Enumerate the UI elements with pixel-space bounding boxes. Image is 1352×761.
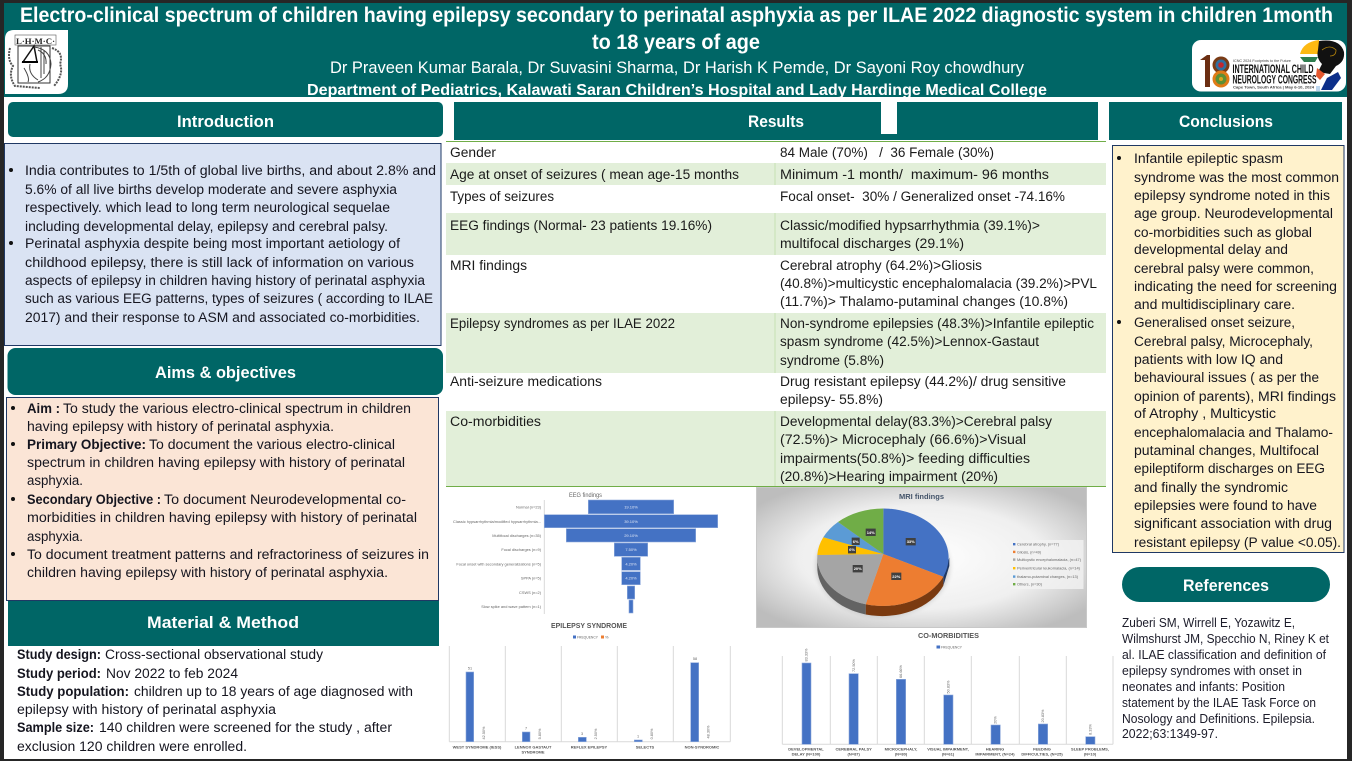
authors: Dr Praveen Kumar Barala, Dr Suvasini Sharma, Dr Harish K Pemde, Dr Sayoni Roy chowdhury [330, 59, 1025, 77]
heading: Results: Results [748, 113, 804, 131]
chart: EEG findings funnel [453, 492, 718, 614]
panel: conclusions text: age group. Neurodevelopmental [1134, 206, 1333, 221]
chart: MRI findings pie [756, 488, 1086, 628]
chart: EEG findings funnel: Normal (n=23) [516, 504, 542, 510]
panel: introduction text: 2017) and their response to ASM and associated co-morbidities. [25, 310, 420, 325]
text block: references: epilepsy syndromes with onset in [1122, 664, 1302, 678]
row: co-morbidities: Developmental delay(83.3%)>Cerebral palsy [780, 414, 1052, 429]
chart: EEG findings funnel: 19.10% [624, 504, 638, 510]
chart: co-morbidities bars: 8.33% [1088, 724, 1092, 735]
heading: Material & Method: Material & Method [147, 614, 299, 632]
chart: epilepsy syndrome bars: SYNDROME [521, 750, 545, 754]
row: age at onset: Minimum -1 month/ maximum- 96 months [780, 167, 1049, 182]
chart: co-morbidities bars: (N=80) [895, 752, 908, 756]
header banner [4, 3, 1347, 99]
chart: epilepsy syndrome bars: 42.50% [482, 726, 486, 739]
panel: conclusions text: co-morbidities such as global [1134, 225, 1312, 240]
panel: aims text: asphyxia. [27, 529, 83, 544]
chart: epilepsy syndrome bars: 58 [693, 657, 697, 661]
title: to 18 years of age [592, 31, 760, 54]
legend: FREQUENCY [577, 634, 598, 640]
pie legend: Gliosis, (n=49) [1017, 549, 1042, 554]
row: MRI findings: (40.8%)>multicystic encephalomalacia (39.2%)>PVL [780, 276, 1097, 291]
chart: epilepsy syndrome bars: EPILEPSY SYNDROME [551, 621, 627, 630]
text block: references [1122, 616, 1329, 741]
row: epilepsy syndromes: syndrome (5.8%) [780, 353, 884, 368]
pie legend: Periventricular leukomalacia, (n=14) [1017, 566, 1081, 571]
chart: co-morbidities bars: DELAY (N=100) [792, 752, 821, 756]
pie legend [1010, 540, 1084, 589]
pie labels: 14% [867, 530, 875, 535]
panel: conclusions text: patients with low IQ and [1134, 352, 1283, 367]
logo: International Child Neurology Congress: ICNC 2024 Footprints to the Future [1233, 59, 1291, 63]
row: anti-seizure medications: Drug resistant epilepsy (44.2%)/ drug sensitive [780, 374, 1066, 389]
chart: EEG findings funnel: 29.10% [624, 533, 638, 538]
heading: Aims & objectives [8, 348, 443, 395]
chart: co-morbidities bars: HEARING [986, 746, 1004, 752]
text block: study details: exclusion 120 children were enrolled. [17, 739, 247, 754]
pie legend: Multicystic encephalomalacia, (n=47) [1017, 557, 1082, 562]
panel: introduction text: including developmental delay, epilepsy and cerebral palsy. [25, 219, 388, 234]
row: epilepsy syndromes: Non-syndrome epilepsies (48.3%)>Infantile epileptic [780, 316, 1094, 331]
text block: references: Nosology and Definitions. Epilepsia. [1122, 712, 1315, 726]
pie labels: 22% [892, 574, 901, 579]
text block: references: Zuberi SM, Wirrell E, Yozawitz E, [1122, 616, 1295, 630]
heading: References [1122, 567, 1330, 602]
chart: co-morbidities bars: DEVELOPMENTAL [788, 746, 824, 752]
panel: aims text: Aim : [27, 401, 60, 416]
panel: conclusions text: indicating the need for screening [1134, 279, 1337, 294]
row: age at onset [450, 167, 1049, 182]
chart: epilepsy syndrome bars: 1 [637, 734, 639, 738]
row: co-morbidities: Co-morbidities [450, 414, 541, 429]
chart: EEG findings funnel: 4.20% [625, 561, 637, 566]
pie legend: thalamo-putaminal changes, (n=13) [1017, 574, 1079, 579]
chart: EEG findings funnel: Multifocal discharges (n=35) [492, 533, 542, 538]
pie labels: 6% [853, 539, 859, 544]
chart: co-morbidities bars: 72.50% [852, 658, 856, 672]
row: anti-seizure medications: epilepsy- 55.8%) [780, 392, 883, 407]
panel: aims text: children having epilepsy with history of perinatal asphyxia. [27, 565, 388, 580]
panel: aims text: having epilepsy with history of perinatal asphyxia. [27, 419, 334, 434]
text block: study details: Study design: [17, 647, 101, 662]
chart: co-morbidities bars: 20% [994, 716, 998, 724]
row: epilepsy syndromes: Epilepsy syndromes as per ILAE 2022 [450, 316, 675, 331]
row: age at onset: Age at onset of seizures ( mean age-15 months [450, 167, 739, 182]
text block: study details: Study population: [17, 684, 129, 699]
panel: conclusions text: epileptiform discharges on EEG [1134, 461, 1325, 476]
chart: epilepsy syndrome bars: 0.80% [650, 728, 654, 739]
panel: conclusions text: developmental delay and [1134, 242, 1288, 257]
panel: conclusions text: epilepsies were found to have [1134, 498, 1317, 513]
panel: conclusions text: Infantile epileptic spasm [1134, 151, 1283, 166]
chart: co-morbidities bars: FEEDING [1033, 746, 1051, 752]
panel: aims text: To document Neurodevelopmental co- [164, 492, 406, 507]
heading: Conclusions [1109, 102, 1342, 140]
text block: references: statement by the ILAE Task Force on [1122, 696, 1316, 710]
panel: aims text: morbidities in children having epilepsy with history of perinatal [27, 510, 417, 525]
panel: conclusions text: of Atrophy , Multicystic [1134, 406, 1276, 421]
row: types of seizures [450, 189, 1065, 204]
chart: EEG findings funnel: Focal onset with secondary generalizations (n=5) [456, 561, 542, 566]
row: co-morbidities: (20.8%)>Hearing impairment (20%) [780, 469, 998, 484]
panel: aims text: To document the various electro-clinical [149, 437, 395, 452]
logo: LHMC emblem [5, 30, 68, 94]
panel: conclusions text [1112, 146, 1344, 552]
chart: co-morbidities bars: IMPAIRMENT, (N=24) [975, 752, 1015, 756]
panel: introduction text: 5.6% of all live births develop moderate and severe asphyxia [25, 182, 397, 197]
text block: study details [17, 647, 413, 754]
logo: LHMC emblem: L·H·M·C· [16, 36, 55, 46]
panel: introduction text: India contributes to 1/5th of global live births, and about 2.8% and [25, 163, 436, 178]
chart: EEG findings funnel: Slow spike and wave pattern (n=1) [481, 604, 542, 609]
row: gender: Gender [450, 145, 497, 160]
chart: co-morbidities bars: CO-MORBIDITIES [918, 631, 979, 640]
pie legend: Others, (n=30) [1017, 582, 1043, 587]
panel: conclusions text: syndrome was the most common [1134, 170, 1339, 185]
pie sides [817, 558, 949, 616]
panel: aims text: To study the various electro-clinical spectrum in children [63, 401, 411, 416]
chart: co-morbidities bars: CEREBRAL PALSY [836, 746, 872, 752]
chart: epilepsy syndrome bars: 48.30% [706, 725, 710, 738]
panel: introduction text: respectively. which lead to long term neurological sequelae [25, 200, 390, 215]
chart: co-morbidities bars [782, 631, 1113, 756]
panel: aims text: spectrum in children having epilepsy with history of perinatal [27, 455, 405, 470]
chart: co-morbidities bars: 50.83% [946, 680, 950, 693]
results table [446, 142, 1106, 486]
heading: Results [454, 102, 1098, 140]
heading: Material & Method [8, 601, 439, 646]
panel: introduction text: aspects of epilepsy in children having history of perinatal asphyxia [25, 273, 425, 288]
text block: references: neonates and infants: Position [1122, 680, 1285, 694]
chart: MRI findings pie: MRI findings [899, 492, 944, 501]
panel: conclusions text: opinion of parents), MRI findings [1134, 389, 1336, 404]
text block: study details: epilepsy with history of perinatal asphyxia [17, 702, 277, 717]
chart: epilepsy syndrome bars: NON-SYNDROMIC [685, 744, 719, 750]
panel: conclusions text: encephalomalacia and Thalamo- [1134, 425, 1333, 440]
title [20, 4, 1333, 54]
row: co-morbidities [450, 414, 1052, 484]
panel: aims text: Secondary Objective : [27, 492, 161, 507]
text block: study details: 140 children were screened for the study , after [99, 720, 393, 735]
chart: epilepsy syndrome bars: LENNOX GASTAUT [515, 744, 552, 750]
chart: epilepsy syndrome bars: 3 [581, 732, 583, 736]
heading: Introduction [8, 102, 443, 137]
chart: epilepsy syndrome bars: SELECTS [636, 744, 655, 750]
panel: introduction text [4, 144, 441, 346]
row: epilepsy syndromes: spasm syndrome (42.5%)>Lennox-Gastaut [780, 334, 1039, 349]
chart: EEG findings funnel: Focal discharges (n=9) [501, 547, 542, 552]
row: MRI findings: Cerebral atrophy (64.2%)>Gliosis [780, 258, 982, 273]
text block: study details: Nov 2022 to feb 2024 [106, 666, 238, 681]
panel: introduction text: Perinatal asphyxia despite being most important aetiology of [25, 236, 400, 251]
chart: epilepsy syndrome bars: 2.50% [594, 728, 598, 739]
row: EEG findings: EEG findings (Normal- 23 patients 19.16%) [450, 218, 712, 233]
panel: conclusions text: Cerebral palsy, Microcephaly, [1134, 334, 1313, 349]
pie labels: 20% [854, 566, 862, 571]
chart: epilepsy syndrome bars: 5.80% [538, 728, 542, 739]
logo: International Child Neurology Congress: Cape Town, South Africa | May 6-10, 2024 [1233, 86, 1315, 90]
text block: study details: Sample size: [17, 720, 94, 735]
heading: Introduction: Introduction [177, 113, 274, 131]
panel: conclusions text: Generalised onset seizure, [1134, 315, 1295, 330]
chart: EEG findings funnel: Classic hypsarrhythmia/modified hypsarrhythmia... [453, 519, 541, 524]
chart: epilepsy syndrome bars: 7 [525, 726, 527, 730]
chart: EEG findings funnel: EEG findings [569, 492, 603, 499]
panel: conclusions text: and finally the syndromic [1134, 480, 1288, 495]
row: gender: 84 Male (70%) / 36 Female (30%) [780, 145, 994, 160]
legend: FREQUENCY [941, 644, 962, 650]
pie legend: Cerebral atrophy, (n=77) [1017, 542, 1060, 547]
chart: epilepsy syndrome bars [449, 621, 730, 754]
chart: co-morbidities bars: SLEEP PROBLEMS, [1071, 746, 1109, 752]
text block: references: Wilmshurst JM, Specchio N, Riney K et [1122, 632, 1329, 646]
panel: introduction text: such as various EEG patterns, types of seizures ( according to ILAE [25, 291, 433, 306]
chart: co-morbidities bars: (N=61) [942, 752, 955, 756]
chart: EEG findings funnel: 4.20% [625, 576, 637, 581]
chart: co-morbidities bars: 66.66% [899, 664, 903, 678]
text block: study details: Study period: [17, 666, 101, 681]
chart: epilepsy syndrome bars: 51 [468, 666, 472, 670]
panel: conclusions text: resistant epilepsy (P value <0.05). [1134, 535, 1341, 550]
pie labels [848, 529, 916, 580]
panel: conclusions text: putaminal changes, Multifocal [1134, 443, 1319, 458]
row: types of seizures: Types of seizures [450, 189, 554, 204]
row: EEG findings: multifocal discharges (29.1%) [780, 236, 964, 251]
pie labels: 33% [907, 539, 915, 544]
row: MRI findings: (11.7%)> Thalamo-putaminal changes (10.8%) [780, 294, 1068, 309]
legend [573, 634, 609, 640]
panel: conclusions text: epilepsy syndrome noted in this [1134, 188, 1330, 203]
chart: co-morbidities bars: DIFFICULTIES, (N=25) [1021, 752, 1063, 756]
chart: co-morbidities bars: VISUAL IMPAIRMENT, [927, 746, 969, 752]
logo: International Child Neurology Congress [1192, 40, 1346, 92]
chart: epilepsy syndrome bars: WEST SYNDROME (IESS) [453, 744, 502, 750]
department: Department of Pediatrics, Kalawati Saran Children’s Hospital and Lady Hardinge Medical College [307, 82, 1047, 99]
chart: epilepsy syndrome bars: REFLEX EPILEPSY [571, 744, 608, 750]
panel: conclusions text: and multidisciplinary care. [1134, 297, 1295, 312]
pie slices [817, 508, 949, 606]
text block: references: al. ILAE classification and definition of [1122, 648, 1326, 662]
panel: conclusions text: cerebral palsy were common, [1134, 261, 1314, 276]
heading: Aims & objectives: Aims & objectives [155, 364, 296, 382]
row: co-morbidities: impairments(50.8%)> feeding difficulties [780, 451, 1030, 466]
row: anti-seizure medications [450, 374, 1066, 407]
chart: co-morbidities bars: (N=10) [1084, 752, 1097, 756]
text block: study details: children up to 18 years of age diagnosed with [134, 684, 413, 699]
text block: references: 2022;63:1349-97. [1122, 727, 1218, 741]
chart: EEG findings funnel: SPPA (n=5) [521, 576, 542, 581]
row: epilepsy syndromes [450, 316, 1094, 368]
row: EEG findings: Classic/modified hypsarrhythmia (39.1%)> [780, 218, 1040, 233]
row: anti-seizure medications: Anti-seizure medications [450, 374, 602, 389]
panel: conclusions text: significant association with drug [1134, 516, 1332, 531]
row: EEG findings [450, 218, 1040, 251]
panel: introduction text: childhood epilepsy, there is still lack of information on various [25, 255, 414, 270]
chart: co-morbidities bars: (N=87) [848, 752, 861, 756]
legend: % [605, 634, 609, 640]
row: MRI findings: MRI findings [450, 258, 527, 273]
panel: aims text: asphyxia. [27, 473, 83, 488]
panel: aims text: Primary Objective: [27, 437, 146, 452]
heading: References: References [1183, 577, 1269, 595]
panel: conclusions text: behavioural issues ( as per the [1134, 370, 1319, 385]
row: types of seizures: Focal onset- 30% / Generalized onset -74.16% [780, 189, 1065, 204]
pie labels: 6% [849, 547, 855, 552]
row: co-morbidities: (72.5%)> Microcephaly (66.6%)>Visual [780, 432, 1026, 447]
chart: EEG findings funnel: 39.10% [624, 519, 638, 524]
text block: study details: Cross-sectional observational study [105, 647, 323, 662]
chart: EEG findings funnel: 7.50% [625, 547, 637, 552]
chart: EEG findings funnel: CSWS (n=2) [519, 590, 542, 595]
panel: aims text [6, 398, 438, 600]
chart: co-morbidities bars: 20.83% [1041, 709, 1045, 722]
heading: Conclusions: Conclusions [1179, 113, 1273, 131]
row: gender [450, 145, 994, 160]
row: MRI findings [450, 258, 1097, 309]
chart: co-morbidities bars: 83.33% [804, 648, 808, 661]
chart: co-morbidities bars: MICROCEPHALY, [885, 746, 917, 752]
panel: aims text: To document treatment patterns and refractoriness of seizures in [27, 547, 429, 562]
